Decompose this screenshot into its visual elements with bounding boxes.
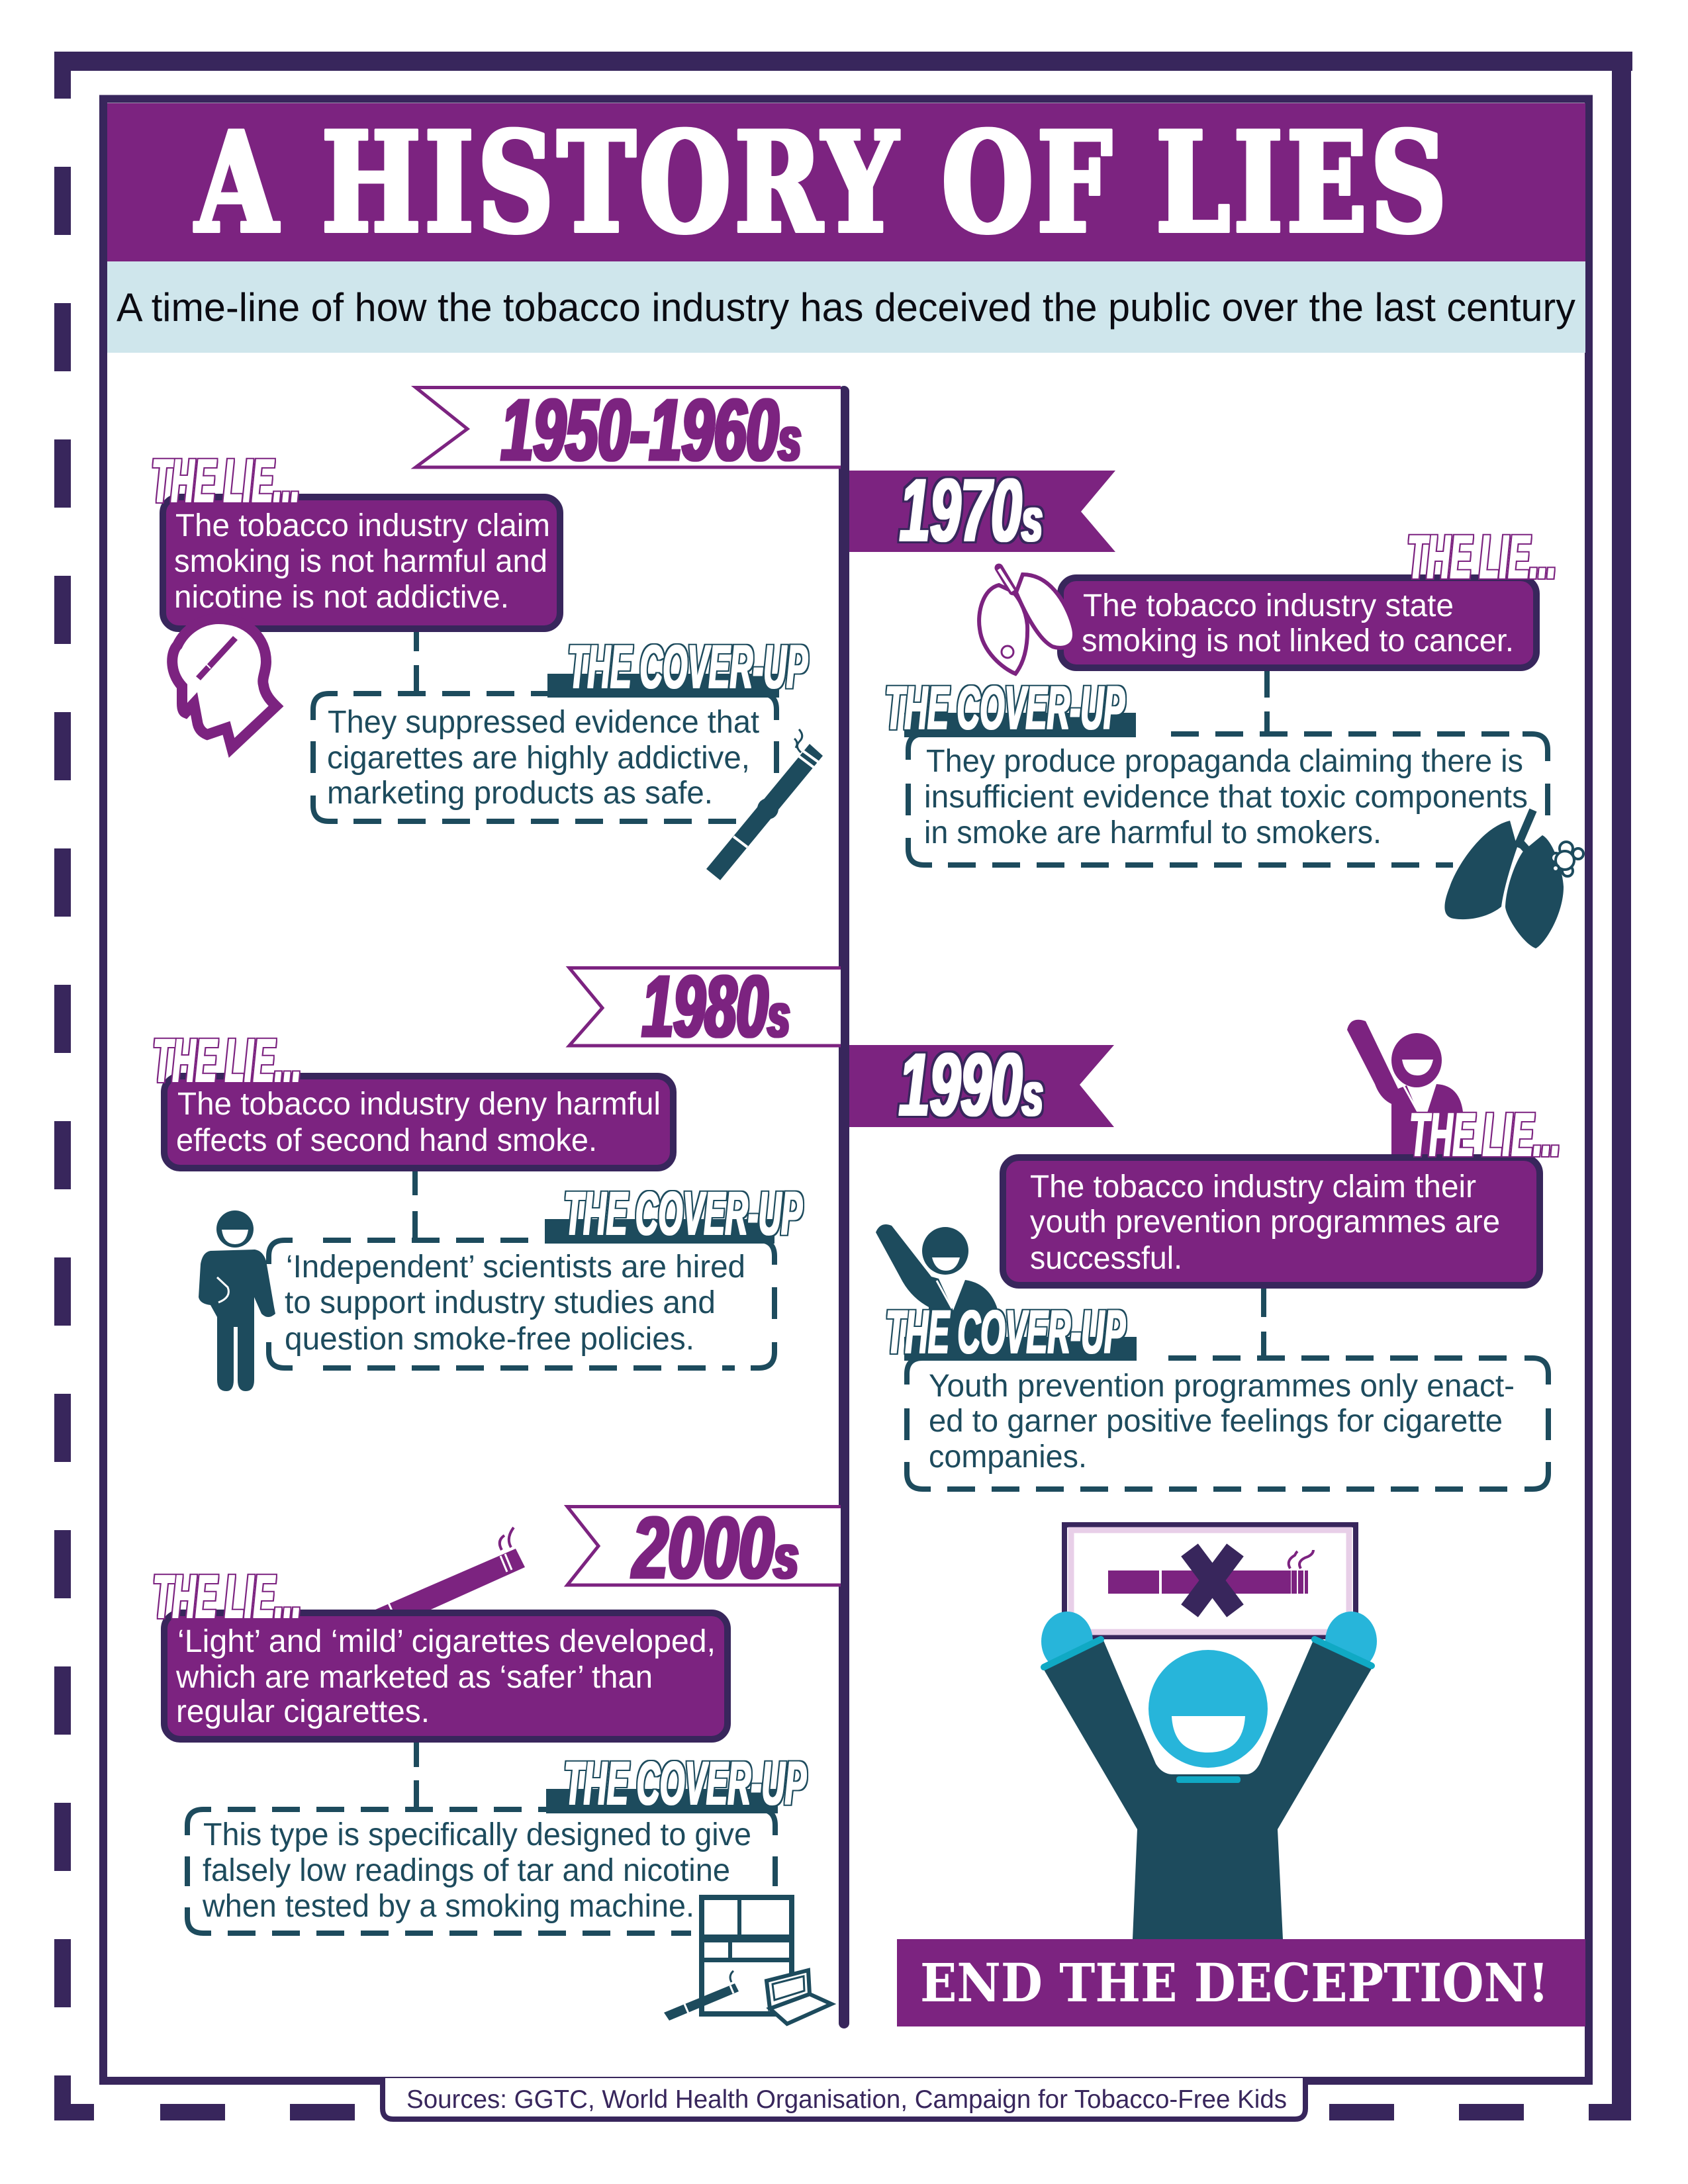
the lie box [164, 1613, 727, 1739]
cover-up dashed box [907, 1358, 1548, 1489]
label bar: the cover-up [886, 1298, 1137, 1366]
cover-up dashed box [908, 734, 1548, 865]
cover-up text: They suppressed evidence that [328, 705, 759, 740]
ribbon: 1950-1960s: 1950-1960s [501, 381, 801, 478]
cover-up dashed box [313, 694, 776, 821]
cover-up text [924, 744, 1528, 850]
ribbon: 1980s: 1980s [642, 958, 790, 1055]
label bar: the cover-up [547, 633, 808, 701]
label bar: the cover-up [545, 1180, 802, 1248]
label: the lie: THE LIE... [1407, 523, 1556, 591]
cover-up text: marketing products as safe. [327, 776, 713, 811]
icon: scientist figure [199, 1210, 275, 1391]
the lie box: smoking is not linked to cancer. [1082, 623, 1514, 659]
the lie box: ‘Light’ and ‘mild’ cigarettes developed, [177, 1624, 716, 1659]
cover-up text: They produce propaganda claiming there is [926, 744, 1523, 779]
cover-up dashed box [187, 1809, 775, 1933]
inner frame [103, 99, 1589, 2081]
label: the lie: THE LIE... [153, 1027, 301, 1095]
cover-up dashed box [269, 1240, 774, 1368]
sources box: Sources: GGTC, World Health Organisation, Campaign for Tobacco-Free Kids [406, 2085, 1287, 2114]
label: the lie: THE LIE... [153, 1563, 301, 1631]
icon: cigarette behind box [369, 1527, 525, 1614]
cover-up text: Youth prevention programmes only enact- [929, 1369, 1515, 1404]
cover-up text: in smoke are harmful to smokers. [924, 815, 1382, 850]
cover-up text: ‘Independent’ scientists are hired [286, 1250, 745, 1285]
cover-up text [202, 1817, 751, 1924]
panel: 1970s [849, 461, 1583, 948]
ribbon: 2000s: 2000s [632, 1499, 798, 1596]
icon: smoking machine [664, 1897, 831, 2024]
icon: teal figure with raised arm [876, 1224, 1000, 1343]
the lie box [164, 1076, 673, 1168]
the lie box: The tobacco industry state [1083, 588, 1454, 623]
connector [414, 629, 419, 694]
connector [414, 1739, 419, 1809]
cover-up text [327, 705, 759, 811]
ribbon: 1950-1960s [416, 381, 841, 478]
the lie box: The tobacco industry claim [175, 508, 550, 543]
label: the lie: THE LIE... [1409, 1101, 1560, 1169]
cover-up text: falsely low readings of tar and nicotine [203, 1853, 730, 1888]
icon: purple figure with raised arm [1347, 1020, 1463, 1165]
the lie box [1060, 578, 1536, 668]
label: the cover-up: THE COVER-UP [886, 1298, 1125, 1366]
the lie box: effects of second hand smoke. [176, 1123, 597, 1158]
connector [1261, 1285, 1266, 1358]
figure holding sign [1041, 1612, 1377, 1939]
panel: 2000s [153, 1499, 841, 2024]
icon: head with cigarette [172, 619, 276, 748]
sources box [383, 2078, 1305, 2119]
connector [1264, 668, 1270, 734]
ribbon: 1970s: 1970s [900, 461, 1043, 560]
label: the cover-up: THE COVER-UP [885, 674, 1125, 742]
panel: end the deception [897, 1525, 1585, 2026]
connector [412, 1168, 418, 1240]
ribbon: 1990s: 1990s [899, 1036, 1043, 1134]
title banner [107, 103, 1585, 264]
cover-up text [929, 1369, 1515, 1475]
label: the lie: THE LIE... [152, 447, 300, 515]
label bar: the cover-up [546, 1750, 806, 1817]
panel: 1980s [153, 958, 841, 1391]
the lie box: regular cigarettes. [176, 1694, 430, 1729]
panel: 1950-1960s [152, 381, 841, 880]
banner: end the deception: END THE DECEPTION! [920, 1952, 1549, 2014]
cover-up text: to support industry studies and [285, 1285, 716, 1320]
the lie box: nicotine is not addictive. [174, 580, 509, 615]
label: the cover-up: THE COVER-UP [568, 633, 808, 701]
cover-up text: companies. [929, 1439, 1087, 1475]
cover-up text: This type is specifically designed to give [203, 1817, 751, 1852]
the lie box: successful. [1030, 1241, 1182, 1276]
the lie box [1003, 1158, 1540, 1285]
timeline spine [839, 386, 849, 2028]
sign: no cigarette [1064, 1525, 1356, 1637]
cover-up text [285, 1250, 745, 1357]
label bar: the cover-up [885, 674, 1136, 742]
icon: lungs with tumour [979, 568, 1074, 674]
icon: diseased lungs [1444, 810, 1583, 948]
the lie box: smoking is not harmful and [174, 544, 547, 579]
panel: 1990s [849, 1020, 1560, 1489]
icon: cigarette [706, 729, 823, 880]
subtitle band [107, 261, 1585, 353]
subtitle: A time-line of how the tobacco industry has deceived the public over the last century [117, 285, 1575, 330]
cover-up text: when tested by a smoking machine. [202, 1889, 694, 1924]
the lie box [163, 497, 560, 629]
the lie box: which are marketed as ‘safer’ than [175, 1660, 653, 1695]
cover-up text: cigarettes are highly addictive, [327, 741, 750, 776]
label: the cover-up: THE COVER-UP [564, 1180, 802, 1248]
cover-up text: ed to garner positive feelings for cigarette [929, 1404, 1503, 1439]
the lie box: The tobacco industry claim their [1030, 1169, 1476, 1205]
cover-up text: question smoke-free policies. [285, 1322, 694, 1357]
cover-up text: insufficient evidence that toxic components [924, 780, 1528, 815]
label: the cover-up: THE COVER-UP [564, 1750, 806, 1817]
the lie box: The tobacco industry deny harmful [177, 1087, 661, 1122]
the lie box: youth prevention programmes are [1030, 1205, 1500, 1240]
banner: end the deception [897, 1939, 1585, 2026]
